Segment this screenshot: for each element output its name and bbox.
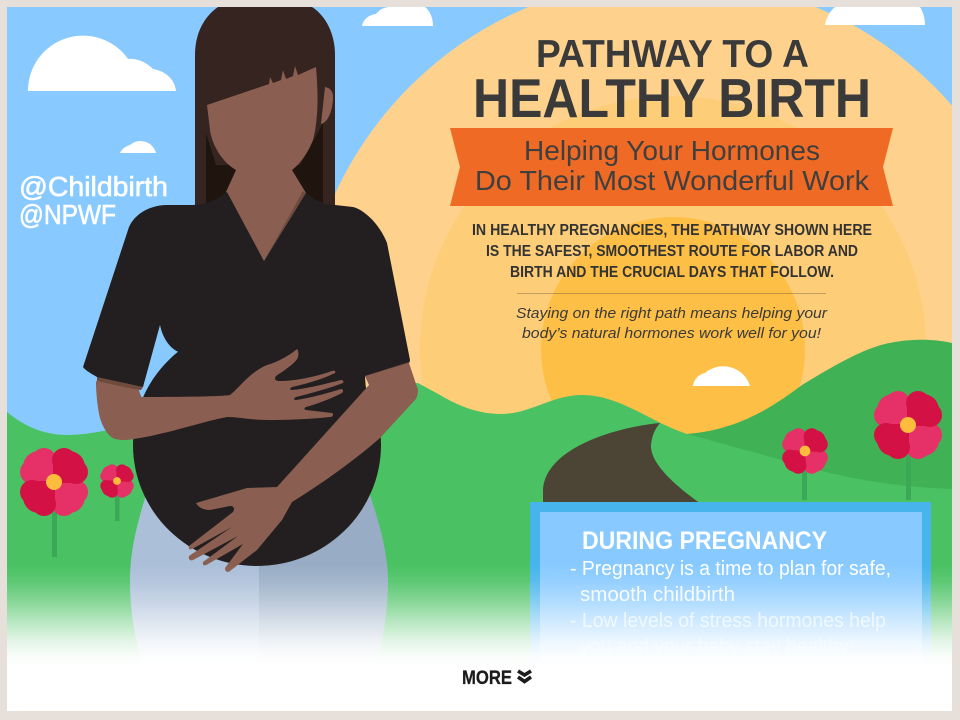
subtitle: Do Their Most Wonderful Work <box>475 165 869 196</box>
cloud: small left <box>120 141 156 153</box>
sky <box>7 7 952 435</box>
face and neck <box>207 66 318 261</box>
social handles: @Childbirth <box>19 171 168 202</box>
title <box>473 33 871 129</box>
bottom white fade <box>7 565 952 667</box>
sun: core <box>541 217 805 434</box>
cloud: top left large <box>28 36 176 91</box>
intro text: IN HEALTHY PREGNANCIES, THE PATHWAY SHOWN HERE <box>472 222 872 239</box>
card heading: DURING PREGNANCY <box>582 527 827 555</box>
card text: smooth childbirth <box>580 584 735 606</box>
italic note <box>516 306 828 342</box>
flower: left small <box>100 464 134 521</box>
bottom white band <box>7 667 952 711</box>
divider <box>517 293 826 294</box>
subtitle: Helping Your Hormones <box>524 135 820 166</box>
cloud: top centre <box>362 7 433 26</box>
jeans right <box>259 495 388 650</box>
italic note: Staying on the right path means helping your <box>516 306 828 322</box>
arm shadows <box>97 362 409 390</box>
cloud: top right <box>825 7 925 25</box>
pathway <box>543 423 698 502</box>
card text <box>570 560 890 640</box>
left arm and upper hand <box>96 349 343 440</box>
flower: left large <box>20 448 88 557</box>
sun: middle glow <box>420 96 926 414</box>
italic note: body’s natural hormones work well for you! <box>522 326 821 342</box>
neck shadow <box>264 191 306 261</box>
card inner <box>540 512 922 644</box>
card: during pregnancy <box>530 502 931 654</box>
intro text: IS THE SAFEST, SMOOTHEST ROUTE FOR LABOR AND <box>486 243 858 260</box>
intro text <box>472 222 872 281</box>
belly <box>133 352 381 566</box>
orange ribbon banner <box>450 128 893 206</box>
card text: - Low levels of stress hormones help <box>570 610 886 632</box>
subtitle <box>475 135 869 196</box>
ear <box>321 87 333 124</box>
card text: - Pregnancy is a time to plan for safe, <box>570 558 891 580</box>
hair <box>195 7 335 206</box>
social handles <box>19 171 168 230</box>
hill: foreground <box>7 383 952 655</box>
card border <box>530 502 931 653</box>
card text: you and your baby stay healthy¹ <box>580 636 855 658</box>
cloud: on sun <box>693 366 750 386</box>
flower: right large <box>874 391 942 500</box>
shirt <box>83 192 410 388</box>
more link: MORE <box>462 668 512 689</box>
hill: back right <box>687 340 952 489</box>
right arm and lower hand <box>189 363 418 572</box>
icon: double chevron <box>518 671 531 682</box>
intro text: BIRTH AND THE CRUCIAL DAYS THAT FOLLOW. <box>510 264 834 281</box>
flower: right small <box>782 428 828 500</box>
jeans left <box>130 497 259 652</box>
pregnant woman illustration <box>83 7 418 670</box>
under hair <box>206 123 323 205</box>
title: PATHWAY TO A <box>536 33 809 76</box>
social handles: @NPWF <box>19 199 116 230</box>
title: HEALTHY BIRTH <box>473 68 871 129</box>
sun: outer glow <box>335 7 952 388</box>
